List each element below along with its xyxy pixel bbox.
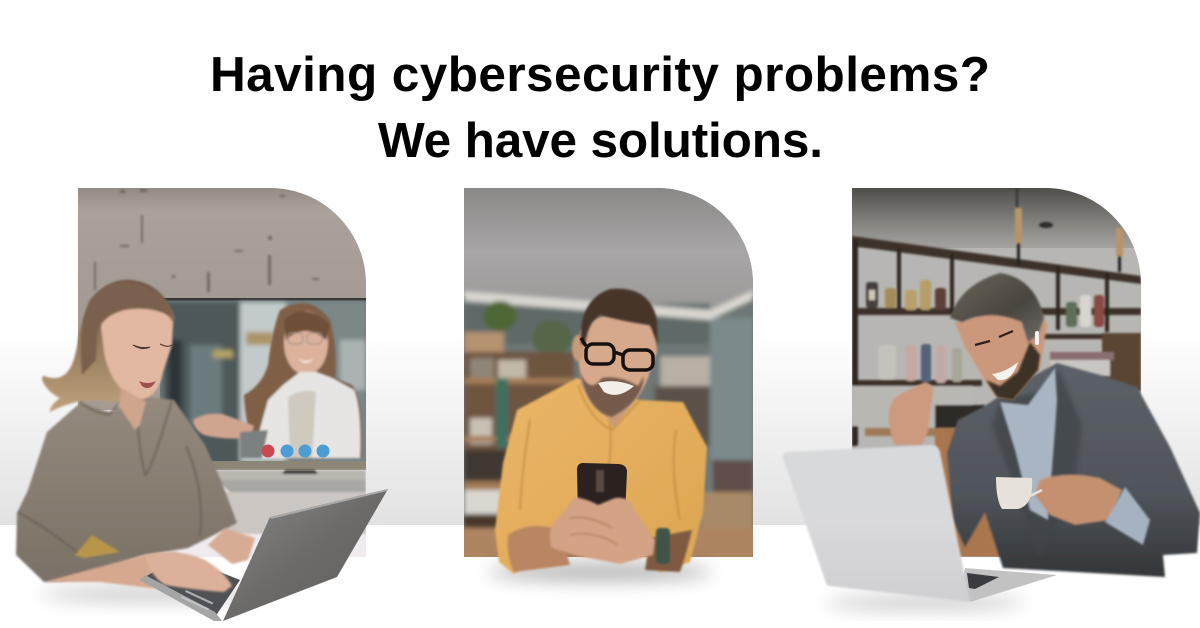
laptop bbox=[783, 445, 1057, 609]
photo background: living room bbox=[460, 188, 757, 562]
beard bbox=[580, 372, 644, 417]
hand with cup bbox=[1035, 474, 1122, 525]
laptop bbox=[140, 489, 388, 621]
shirt cuff bbox=[1105, 487, 1150, 545]
table under TV bbox=[212, 470, 366, 534]
woman typing on laptop bbox=[16, 280, 388, 621]
panel: cafe laptop scene bbox=[783, 188, 1200, 609]
face bbox=[576, 314, 657, 417]
photo background: bar shelves bbox=[852, 188, 1141, 557]
hands bbox=[550, 497, 655, 564]
jacket bbox=[947, 363, 1200, 577]
arm and hand bbox=[44, 552, 232, 590]
bottles on shelves bbox=[866, 280, 1114, 383]
photo background: office wall and TV bbox=[78, 188, 366, 557]
forearms bbox=[508, 526, 570, 572]
sweater body bbox=[16, 396, 237, 582]
woman on screen bbox=[193, 303, 362, 458]
earbud bbox=[1035, 331, 1039, 345]
businessman with coffee bbox=[783, 273, 1200, 609]
panel: video call scene bbox=[16, 188, 388, 621]
face bbox=[955, 300, 1047, 400]
neck bbox=[580, 380, 638, 428]
hair bbox=[950, 273, 1044, 342]
TV bbox=[160, 298, 366, 470]
ear bbox=[572, 335, 584, 361]
shirt bbox=[1000, 368, 1057, 520]
eyes and mouth bbox=[133, 344, 172, 388]
raised fist bbox=[889, 382, 933, 445]
watch bbox=[656, 528, 670, 564]
glasses bbox=[581, 338, 653, 370]
panel: smartphone scene bbox=[460, 188, 757, 581]
title: Having cybersecurity problems? bbox=[210, 47, 990, 102]
smile bbox=[598, 381, 634, 395]
shadow bbox=[488, 563, 712, 581]
hair back bbox=[42, 280, 175, 412]
hand on keyboard bbox=[145, 552, 232, 592]
phone bbox=[577, 463, 627, 515]
jacket lapel shading bbox=[992, 368, 1082, 560]
yellow skirt detail bbox=[75, 535, 120, 558]
neck bbox=[118, 388, 146, 430]
beard bbox=[986, 342, 1040, 400]
hair bbox=[581, 289, 658, 345]
face bbox=[100, 304, 173, 400]
sweater folds and collar bbox=[18, 390, 201, 553]
eyes and smile bbox=[975, 331, 1013, 345]
hair front bbox=[81, 282, 173, 375]
man with phone bbox=[488, 289, 712, 581]
shadow bbox=[40, 586, 260, 602]
coffee cup bbox=[996, 477, 1032, 509]
title bbox=[210, 47, 990, 168]
shirt bbox=[495, 378, 707, 574]
title: We have solutions. bbox=[378, 113, 823, 168]
